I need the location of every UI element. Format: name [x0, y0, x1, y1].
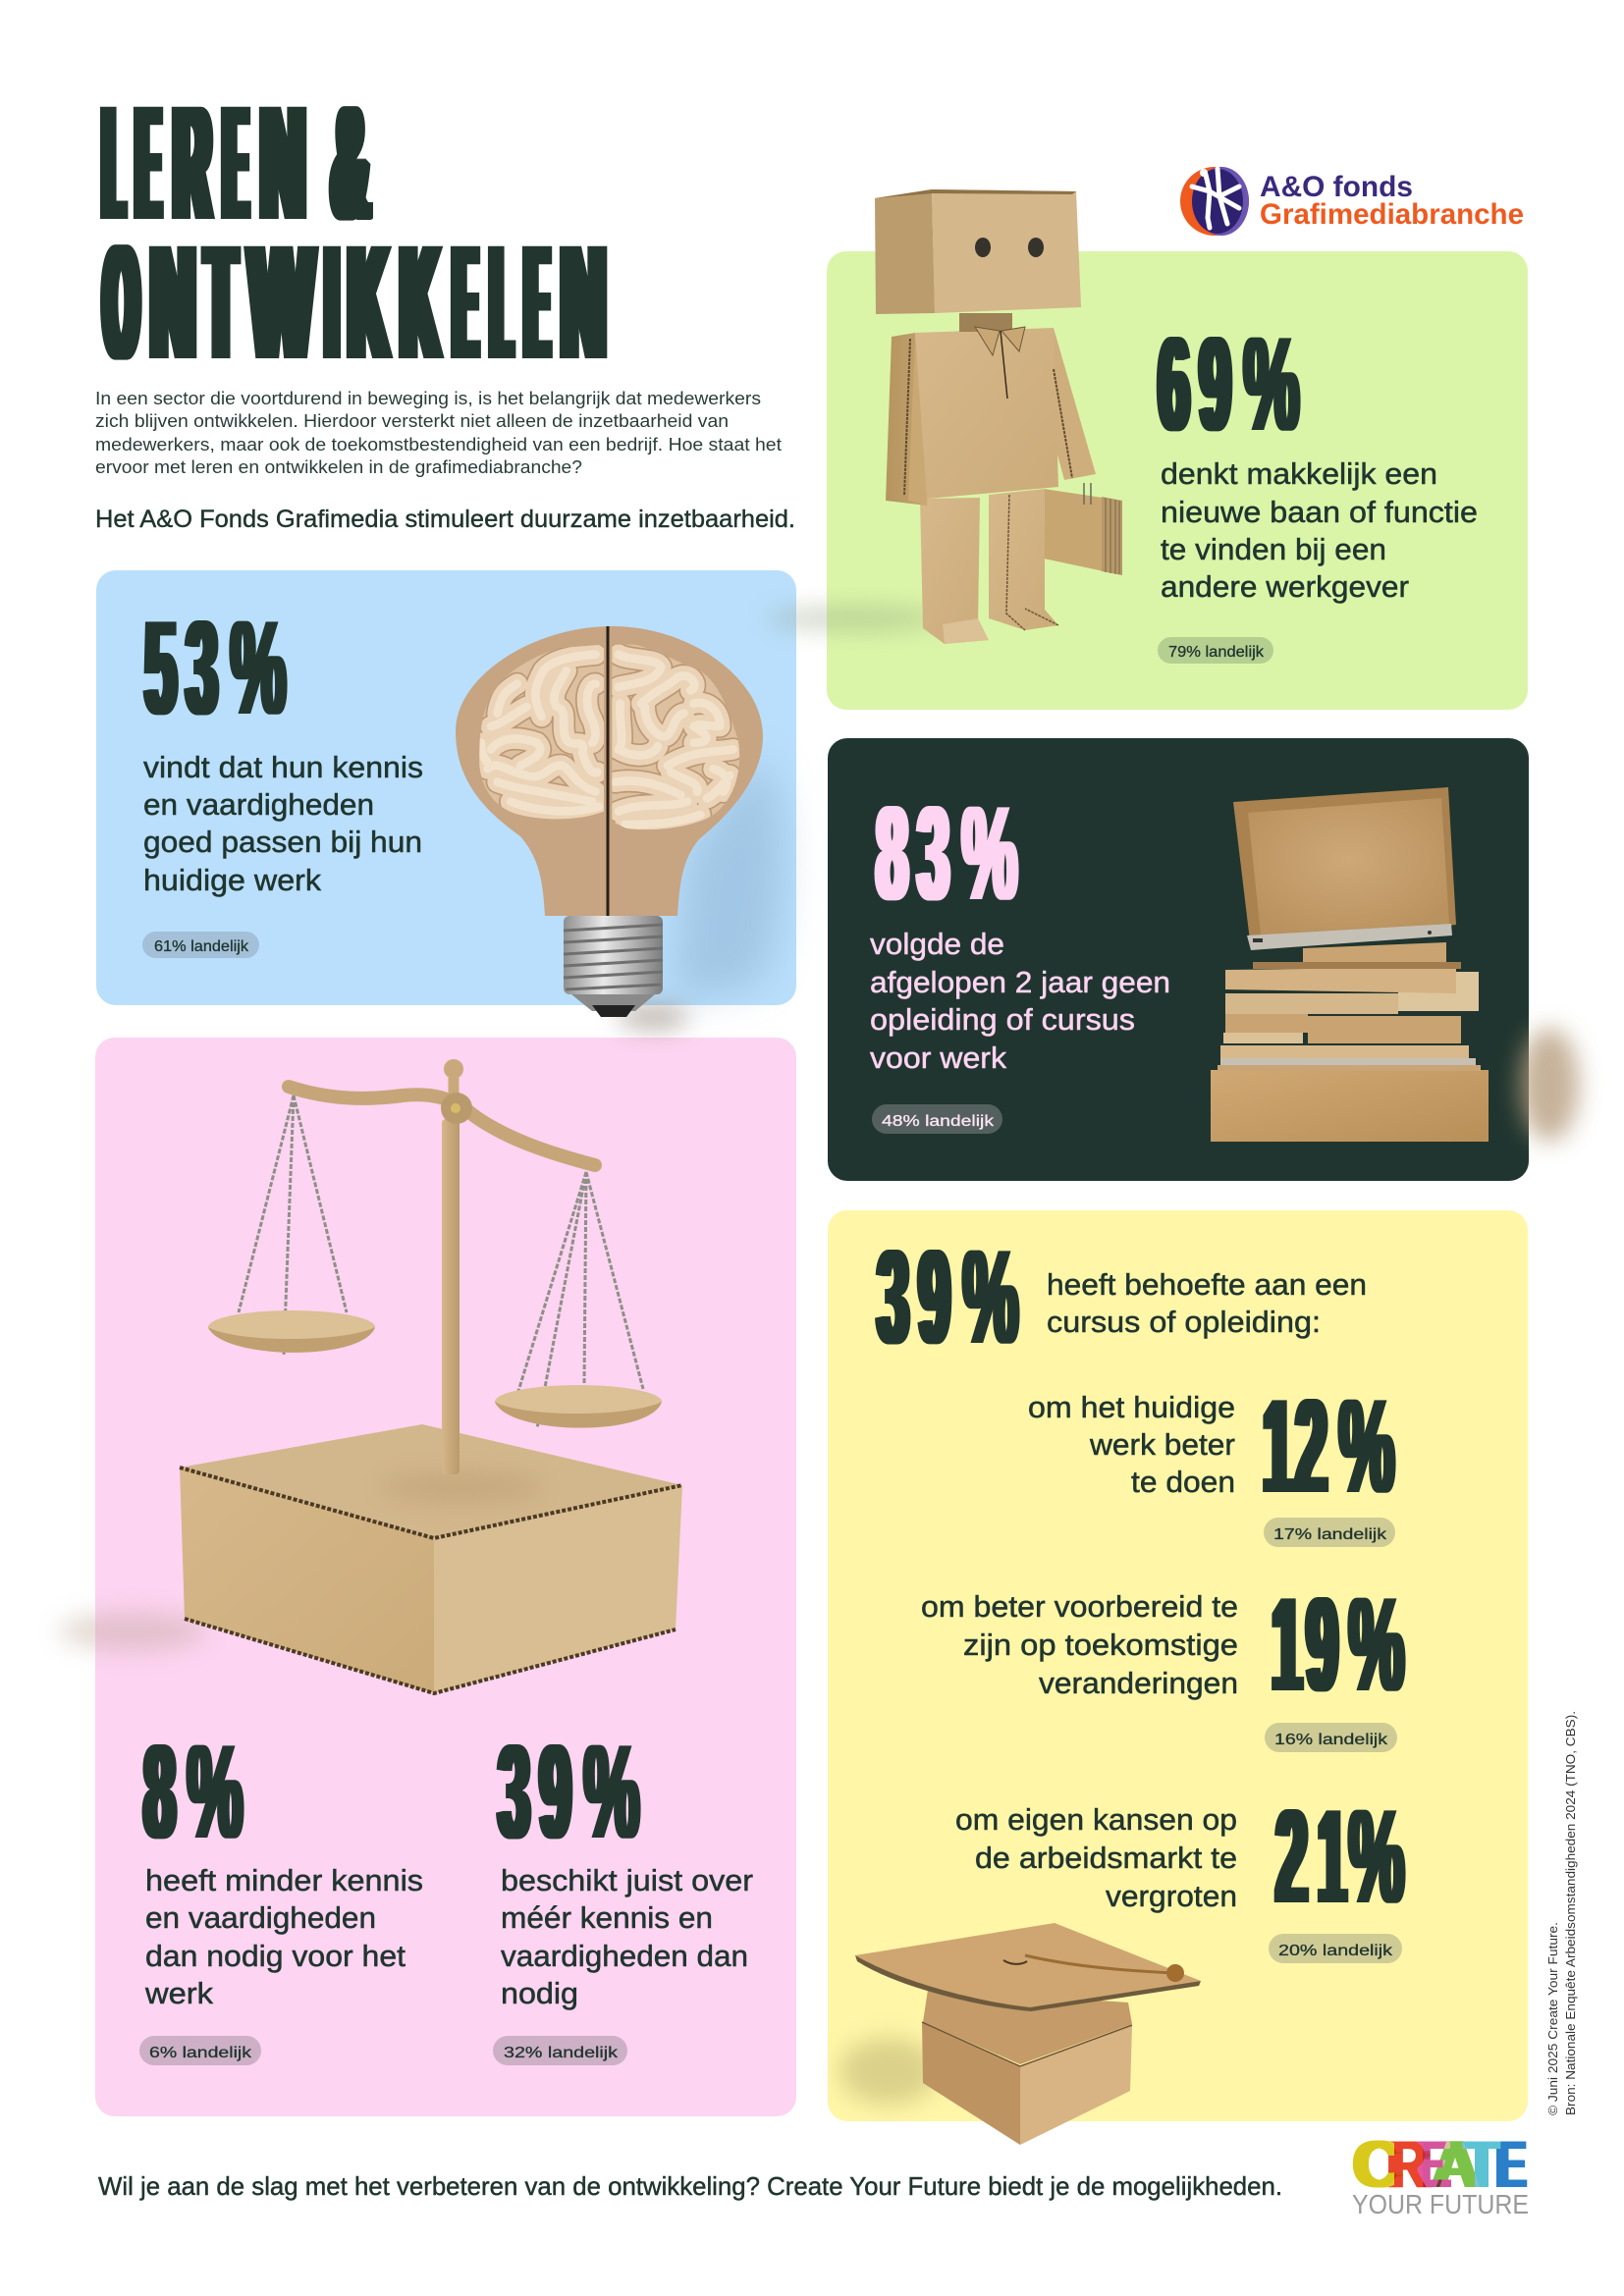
text: kennis past bij werk: vindt dat hun kennis	[143, 750, 423, 784]
title: &	[332, 73, 369, 254]
stat: 53%: 3	[187, 593, 218, 742]
text: minder kennis: en vaardigheden	[145, 1900, 376, 1935]
text: meer kennis: méér kennis en	[501, 1900, 713, 1935]
credits: © Juni 2025 Create Your Future.	[1545, 1922, 1560, 2115]
title: O	[104, 212, 138, 394]
pill: 32% landelijk: 32% landelijk	[504, 2045, 619, 2061]
text: nieuwe baan: nieuwe baan of functie	[1161, 495, 1478, 529]
text: huidige werk: om het huidige	[1028, 1390, 1235, 1424]
credits	[1545, 1711, 1578, 2115]
panel: scale (pink)	[59, 1038, 796, 2116]
panel: new job (green): %	[1244, 309, 1299, 458]
text: behoefte: heeft behoefte aan een	[1047, 1267, 1367, 1302]
icon: brain light bulb	[456, 626, 763, 1017]
logo: Create Your Future: R	[1387, 2127, 1431, 2202]
intro text: ervoor met leren en ontwikkelen in de grafimediabranche?	[95, 457, 582, 477]
panel: scale (pink): %	[584, 1717, 639, 1866]
logo: Create Your Future: E	[1496, 2127, 1526, 2202]
text: meer kennis	[501, 1863, 753, 2010]
panel: training need (yellow): %	[1339, 1371, 1394, 1521]
stat: 39% behoefte: 9	[919, 1222, 950, 1371]
stat: 21%: 2	[1276, 1782, 1308, 1931]
panel: new job (green)	[766, 189, 1528, 710]
text: toekomst: veranderingen	[1039, 1666, 1238, 1700]
pill: 20% landelijk	[1269, 1934, 1402, 1963]
text: kennis past bij werk: huidige werk	[143, 863, 322, 897]
text: kennis past bij werk: en vaardigheden	[143, 787, 374, 822]
text: toekomst: om beter voorbereid te	[921, 1589, 1238, 1624]
stat: 39% meer kennis: 9	[540, 1717, 571, 1866]
pill: 61% landelijk: 61% landelijk	[154, 938, 249, 955]
logo: Create Your Future: T	[1465, 2127, 1498, 2202]
pill: 79% landelijk	[1158, 637, 1273, 664]
text: kennis past bij werk	[143, 750, 423, 897]
pill: 48% landelijk	[872, 1104, 1002, 1134]
stat: 53%: 5	[145, 593, 177, 742]
panel: no training (dark): %	[962, 778, 1017, 928]
pill: 16% landelijk: 16% landelijk	[1274, 1732, 1388, 1748]
pill: 61% landelijk	[142, 932, 259, 958]
text: meer kennis: vaardigheden dan	[501, 1939, 748, 1973]
cap shadow	[839, 2038, 938, 2105]
intro text	[95, 389, 782, 477]
title: E	[526, 212, 548, 394]
pill: 79% landelijk: 79% landelijk	[1168, 644, 1265, 661]
text: kansen: vergroten	[1106, 1879, 1237, 1913]
title: L	[104, 73, 123, 254]
logo: Create Your Future: C	[1353, 2127, 1402, 2202]
title: E	[225, 73, 246, 254]
title: R	[174, 73, 210, 254]
stat: 12%: 1	[1264, 1371, 1293, 1521]
logo: Create Your Future	[1352, 2127, 1529, 2219]
robot shadow	[766, 607, 943, 630]
intro text: zich blijven ontwikkelen. Hierdoor versterkt niet alleen de inzetbaarheid van	[95, 411, 729, 431]
text: geen opleiding: voor werk	[870, 1041, 1007, 1075]
icon: cardboard robot	[875, 189, 1122, 644]
pill: 32% landelijk	[493, 2036, 627, 2065]
panel: training need (yellow)	[828, 1210, 1528, 2145]
text: kansen	[955, 1802, 1237, 1913]
text: meer kennis: nodig	[501, 1976, 578, 2010]
pill: 6% landelijk: 6% landelijk	[149, 2045, 252, 2061]
title: T	[206, 212, 236, 394]
panel: training need (yellow): %	[1349, 1782, 1404, 1931]
text: behoefte	[1047, 1267, 1367, 1339]
logo: Create Your Future: A	[1432, 2127, 1479, 2202]
stat: 39% behoefte: 3	[878, 1222, 909, 1371]
logo: A&O fonds: Grafimediabranche	[1260, 198, 1524, 231]
intro statement: Het A&O Fonds Grafimedia stimuleert duurzame inzetbaarheid.	[95, 506, 795, 533]
title: K	[349, 212, 388, 394]
pill: 48% landelijk: 48% landelijk	[882, 1113, 995, 1130]
stat: 39% meer kennis: 3	[499, 1717, 530, 1866]
bulb shadow	[618, 756, 784, 1031]
title: E	[137, 73, 159, 254]
stat: 83%: 3	[918, 778, 948, 928]
text: kennis past bij werk: goed passen bij hun	[143, 825, 422, 859]
pill: 6% landelijk	[139, 2036, 261, 2065]
intro text: In een sector die voortdurend in beweging is, is het belangrijk dat medewerkers	[95, 389, 761, 408]
logo: Create Your Future: YOUR FUTURE	[1352, 2189, 1529, 2219]
icon: books and open box	[1211, 787, 1489, 1142]
text: nieuwe baan: denkt makkelijk een	[1161, 456, 1437, 491]
text: geen opleiding: opleiding of cursus	[870, 1002, 1135, 1037]
stat: 69%: 9	[1200, 309, 1231, 458]
title: L	[492, 212, 511, 394]
text: toekomst: zijn op toekomstige	[963, 1628, 1238, 1662]
intro text: medewerkers, maar ook de toekomstbestendigheid van een bedrijf. Hoe staat het	[95, 435, 782, 454]
panel: no training (dark)	[828, 738, 1579, 1181]
stat: 83%: 8	[877, 778, 907, 928]
title: K	[401, 212, 439, 394]
pill: 16% landelijk	[1265, 1723, 1397, 1752]
icon: cardboard balance scale	[180, 1059, 682, 1693]
text: toekomst	[921, 1589, 1238, 1700]
stat: 19%: 1	[1272, 1570, 1302, 1719]
text: geen opleiding: volgde de	[870, 927, 1004, 961]
panel: training need (yellow): %	[963, 1222, 1018, 1371]
stat: 21%: 1	[1319, 1782, 1346, 1931]
text: minder kennis: dan nodig voor het	[145, 1939, 406, 1973]
panel: knowledge fit (blue): %	[231, 593, 286, 742]
title: I	[326, 212, 338, 394]
text: huidige werk: werk beter	[1089, 1427, 1235, 1462]
text: nieuwe baan: te vinden bij een	[1161, 532, 1386, 566]
text: behoefte: cursus of opleiding:	[1047, 1305, 1321, 1339]
stat: 12%: 2	[1296, 1371, 1327, 1521]
title	[104, 73, 606, 394]
credits: Bron: Nationale Enquête Arbeidsomstandigheden 2024 (TNO, CBS).	[1563, 1711, 1578, 2115]
books shadow	[1520, 1028, 1579, 1142]
text: nieuwe baan	[1161, 456, 1478, 604]
stat: 69%: 6	[1159, 309, 1190, 458]
text: kansen: om eigen kansen op	[955, 1802, 1237, 1837]
text: huidige werk: te doen	[1131, 1465, 1235, 1499]
pill: 17% landelijk	[1264, 1518, 1395, 1547]
title: E	[455, 212, 476, 394]
panel: scale (pink): %	[188, 1717, 243, 1866]
scale shadow	[59, 1612, 206, 1651]
icon: cardboard graduation cap	[855, 1923, 1201, 2145]
closing line: Wil je aan de slag met het verbeteren van de ontwikkeling? Create Your Future biedt je de mogelijkheden.	[98, 2171, 1282, 2201]
text: huidige werk	[1028, 1390, 1235, 1499]
text: geen opleiding	[870, 927, 1170, 1075]
text: nieuwe baan: andere werkgever	[1161, 569, 1409, 604]
panel: knowledge fit (blue)	[96, 570, 796, 1031]
logo: A&O fonds: A&O fonds	[1260, 171, 1413, 203]
logo: A&O fonds	[1180, 167, 1524, 236]
text: minder kennis: heeft minder kennis	[145, 1863, 423, 1897]
pill: 17% landelijk: 17% landelijk	[1273, 1526, 1387, 1543]
title: N	[151, 212, 194, 394]
stat: 8%: 8	[144, 1717, 175, 1866]
text: minder kennis	[144, 1863, 423, 2010]
title: N	[261, 73, 304, 254]
pill: 20% landelijk: 20% landelijk	[1278, 1943, 1393, 1959]
title: W	[249, 212, 313, 394]
text: meer kennis: beschikt juist over	[501, 1863, 753, 1897]
stat: 19%: 9	[1307, 1570, 1337, 1719]
panel: training need (yellow): %	[1349, 1570, 1404, 1719]
logo: Create Your Future: E	[1417, 2127, 1450, 2202]
text: kansen: de arbeidsmarkt te	[975, 1841, 1237, 1875]
text: minder kennis: werk	[144, 1976, 214, 2010]
text: N	[562, 212, 605, 394]
text: geen opleiding: afgelopen 2 jaar geen	[870, 965, 1170, 999]
